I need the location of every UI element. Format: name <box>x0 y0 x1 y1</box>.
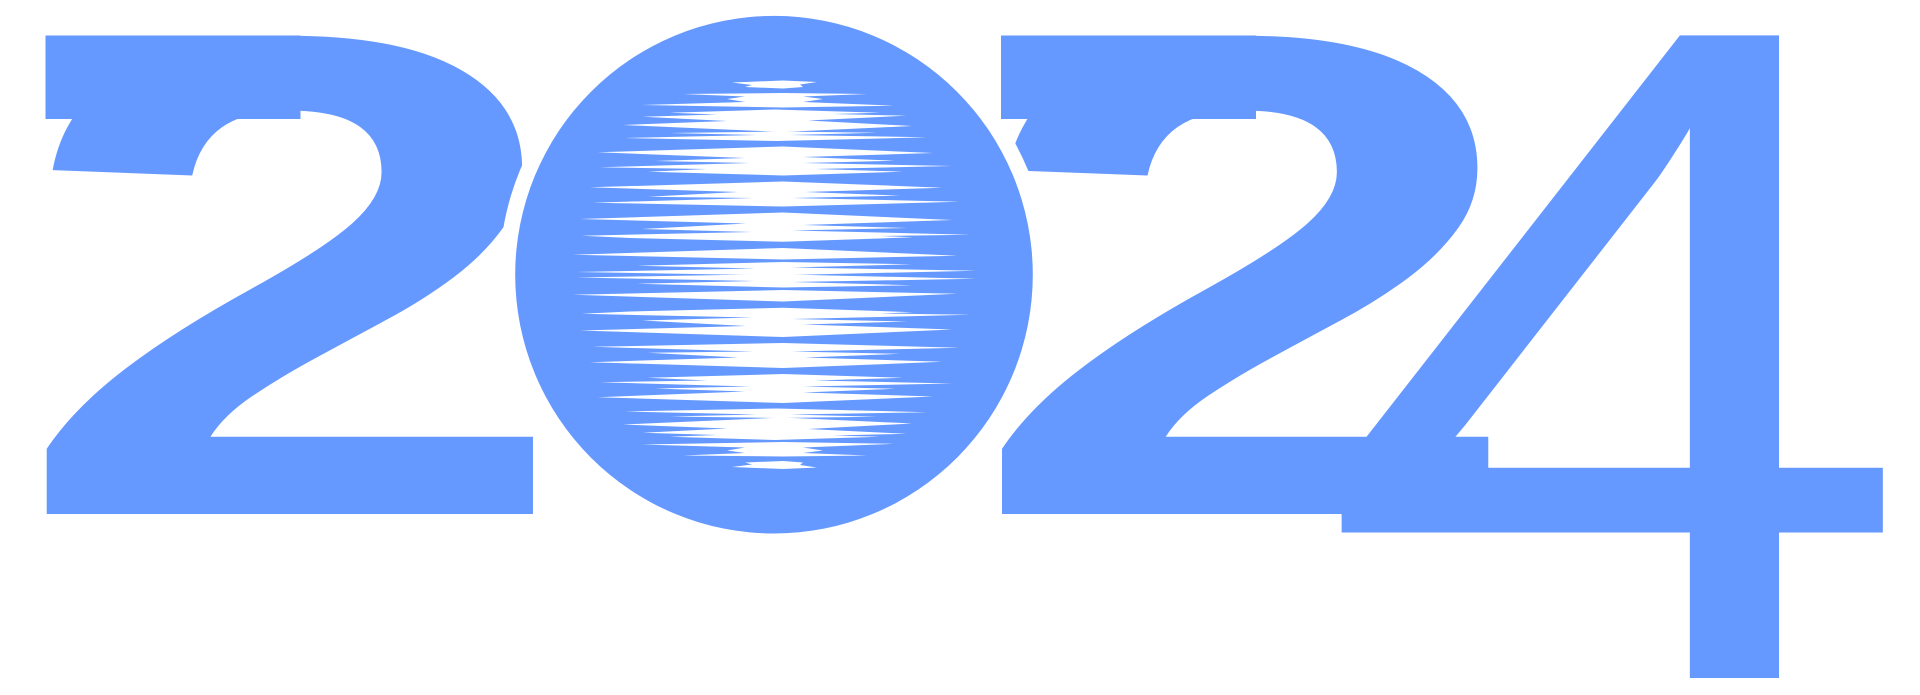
disc <box>515 16 1033 534</box>
white gap ring around the globe <box>499 0 1049 549</box>
stripes: upper half <box>573 80 976 275</box>
globe disc with striped highlight, standing in for the 0 <box>515 16 1033 534</box>
flat top bar on second 2 <box>1001 36 1256 119</box>
digit: 0 behind the globe: 0 <box>663 58 885 505</box>
stripes: lower half, mirrored <box>573 274 976 469</box>
flat top bar on first 2 <box>46 36 300 119</box>
